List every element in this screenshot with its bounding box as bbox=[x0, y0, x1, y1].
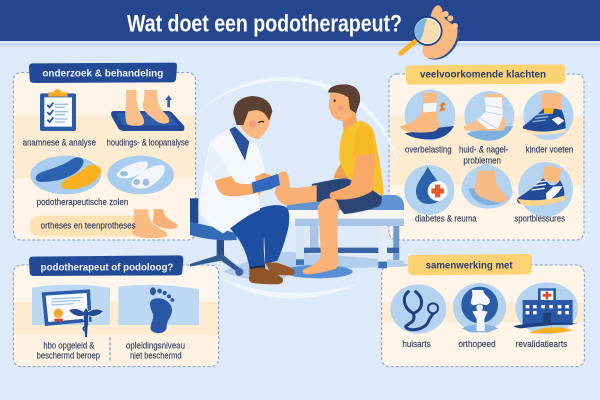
label: revalidatiearts bbox=[516, 339, 568, 349]
pill: ortheses bbox=[29, 216, 140, 236]
label: sportblessures bbox=[514, 214, 565, 224]
heading pill bbox=[406, 64, 565, 85]
icon: clipboard bbox=[40, 89, 76, 131]
patient bbox=[275, 84, 384, 274]
heading pill bbox=[29, 255, 183, 276]
label: diabetes & reuma bbox=[415, 214, 477, 224]
icon: huid- en nagelproblemen bbox=[464, 91, 514, 141]
heading pill bbox=[29, 63, 177, 83]
labels: hbo: beschermd beroep bbox=[37, 351, 100, 361]
label: huisarts bbox=[402, 339, 431, 349]
label bbox=[459, 145, 508, 165]
central illustration: podotherapist treating patient bbox=[190, 77, 406, 298]
icon: kinder voeten bbox=[523, 90, 573, 140]
labels: hbo bbox=[37, 340, 100, 361]
icon: stethoscope bbox=[390, 284, 446, 334]
floor shadow bbox=[223, 252, 406, 280]
icon: foot with magnifier bbox=[401, 5, 459, 60]
header banner bbox=[0, 0, 600, 46]
label: ortheses en teenprotheses bbox=[41, 220, 136, 230]
heading pill bbox=[408, 254, 532, 275]
icon: diploma and caduceus bbox=[32, 285, 110, 337]
icon: voet bbox=[461, 163, 513, 209]
chair bbox=[190, 198, 243, 276]
panel: podotherapeut of podoloog bbox=[13, 255, 219, 367]
panel: samenwerking met bbox=[382, 254, 584, 367]
title: Wat doet een podotherapeut? bbox=[127, 10, 402, 38]
label: podotherapeutische zolen bbox=[37, 197, 128, 207]
panel: veelvoorkomende klachten bbox=[389, 64, 584, 240]
label: kinder voeten bbox=[526, 145, 573, 155]
icon: feet bbox=[132, 209, 178, 238]
heading: podotherapeut of podoloog? bbox=[41, 263, 173, 274]
heading: onderzoek & behandeling bbox=[42, 69, 163, 80]
icon: foot pressure mat bbox=[111, 90, 184, 131]
labels: opleidingsniveau bbox=[126, 340, 185, 361]
icon: diabetes en reuma bbox=[404, 165, 454, 215]
labels: hbo: hbo opgeleid & bbox=[43, 340, 94, 350]
label: overbelasting bbox=[405, 145, 452, 155]
icon: toe orthoses bbox=[107, 156, 174, 194]
podotherapist bbox=[198, 96, 295, 284]
icon: knee joint bbox=[453, 283, 506, 332]
heading: samenwerking met bbox=[426, 260, 513, 271]
label: orthopeed bbox=[458, 339, 496, 349]
label: anamnese & analyse bbox=[23, 137, 96, 147]
treatment bench bbox=[287, 195, 404, 268]
panel: onderzoek & behandeling bbox=[13, 63, 196, 240]
label: problemen bbox=[463, 155, 501, 165]
labels: opleidingsniveau: opleidingsniveau bbox=[126, 340, 185, 350]
label: houdings- & loopanalyse bbox=[107, 137, 189, 147]
icon: insoles bbox=[30, 156, 101, 194]
icon: overbelasting bbox=[400, 90, 455, 140]
icon: sportschoen bbox=[517, 162, 573, 217]
labels: opleidingsniveau: niet beschermd bbox=[130, 351, 182, 361]
label: huid- & nagel- bbox=[459, 145, 508, 155]
icon: footprint bbox=[118, 285, 199, 333]
heading: veelvoorkomende klachten bbox=[420, 70, 546, 81]
icon: hospital bbox=[513, 282, 579, 334]
